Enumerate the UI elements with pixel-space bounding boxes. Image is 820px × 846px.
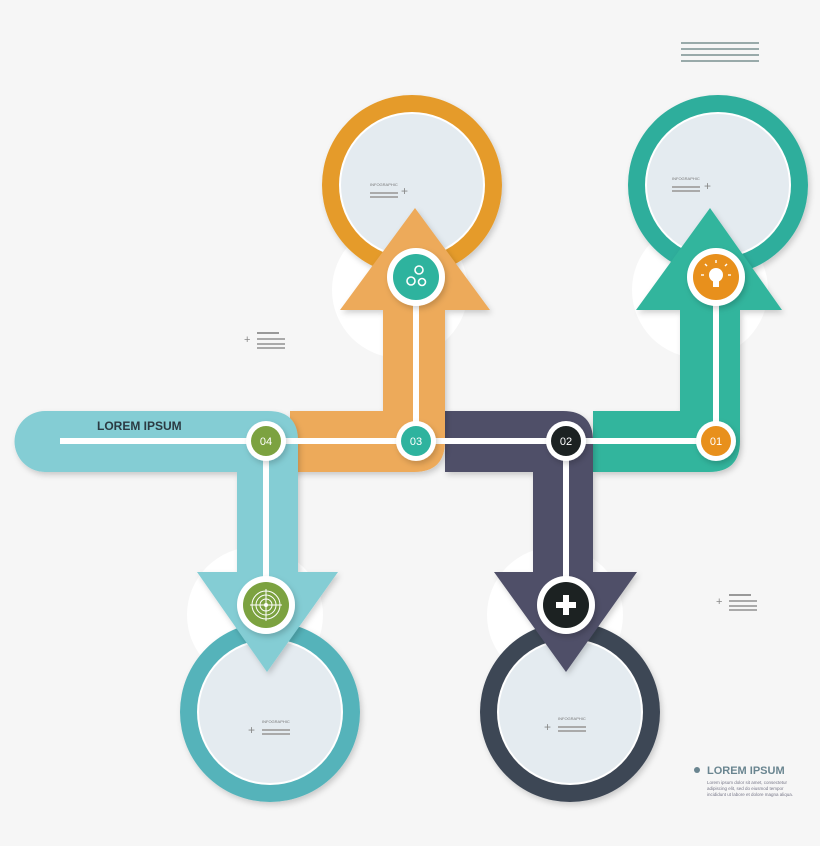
arrow: orange up — [290, 208, 490, 472]
heading: lorem ipsum band: LOREM IPSUM — [97, 419, 182, 433]
text block: left small: + — [244, 334, 250, 346]
arrow: dark down — [445, 411, 637, 672]
text block: bottom right — [694, 765, 793, 797]
circle: top orange — [322, 95, 502, 275]
text block: top right — [681, 42, 759, 62]
node 03: 03 — [410, 436, 422, 448]
icon: gears — [387, 248, 445, 306]
glow circles — [187, 222, 768, 683]
text block: right small — [716, 594, 757, 611]
node 01 — [696, 421, 736, 461]
text block: left small — [244, 332, 285, 349]
node 02 — [546, 421, 586, 461]
circle: bottom teal-blue — [180, 622, 360, 802]
circle: bottom dark: INFOGRAPHIC — [558, 716, 586, 721]
connector lines — [60, 277, 716, 605]
node 03 — [396, 421, 436, 461]
circle: top teal: INFOGRAPHIC — [672, 176, 700, 181]
icon: lightbulb — [687, 248, 745, 306]
icon: target — [237, 576, 295, 634]
circle: bottom teal-blue: + — [248, 723, 255, 737]
text block: bottom right: LOREM IPSUM — [707, 765, 785, 777]
arrow: light blue down — [15, 411, 338, 672]
icon: plus — [537, 576, 595, 634]
arrow: teal up — [593, 208, 782, 472]
circle: bottom dark — [480, 622, 660, 802]
circle: top teal — [628, 95, 808, 275]
text block: bottom right: Lorem ipsum dolor sit amet, consectetur — [707, 780, 788, 785]
node 04: 04 — [260, 436, 272, 448]
circle: bottom dark: + — [544, 720, 551, 734]
node 01: 01 — [710, 436, 722, 448]
circle: top orange: INFOGRAPHIC — [370, 182, 398, 187]
text block: bottom right: incididunt ut labore et dolore magna aliqua. — [707, 792, 793, 797]
node 04 — [246, 421, 286, 461]
text block: right small: + — [716, 596, 722, 608]
text block: bottom right: adipiscing elit, sed do eiusmod tempor — [707, 786, 784, 791]
circle: top orange: + — [401, 184, 408, 198]
circle: top teal: + — [704, 179, 711, 193]
node 02: 02 — [560, 436, 572, 448]
circle: bottom teal-blue: INFOGRAPHIC — [262, 719, 290, 724]
